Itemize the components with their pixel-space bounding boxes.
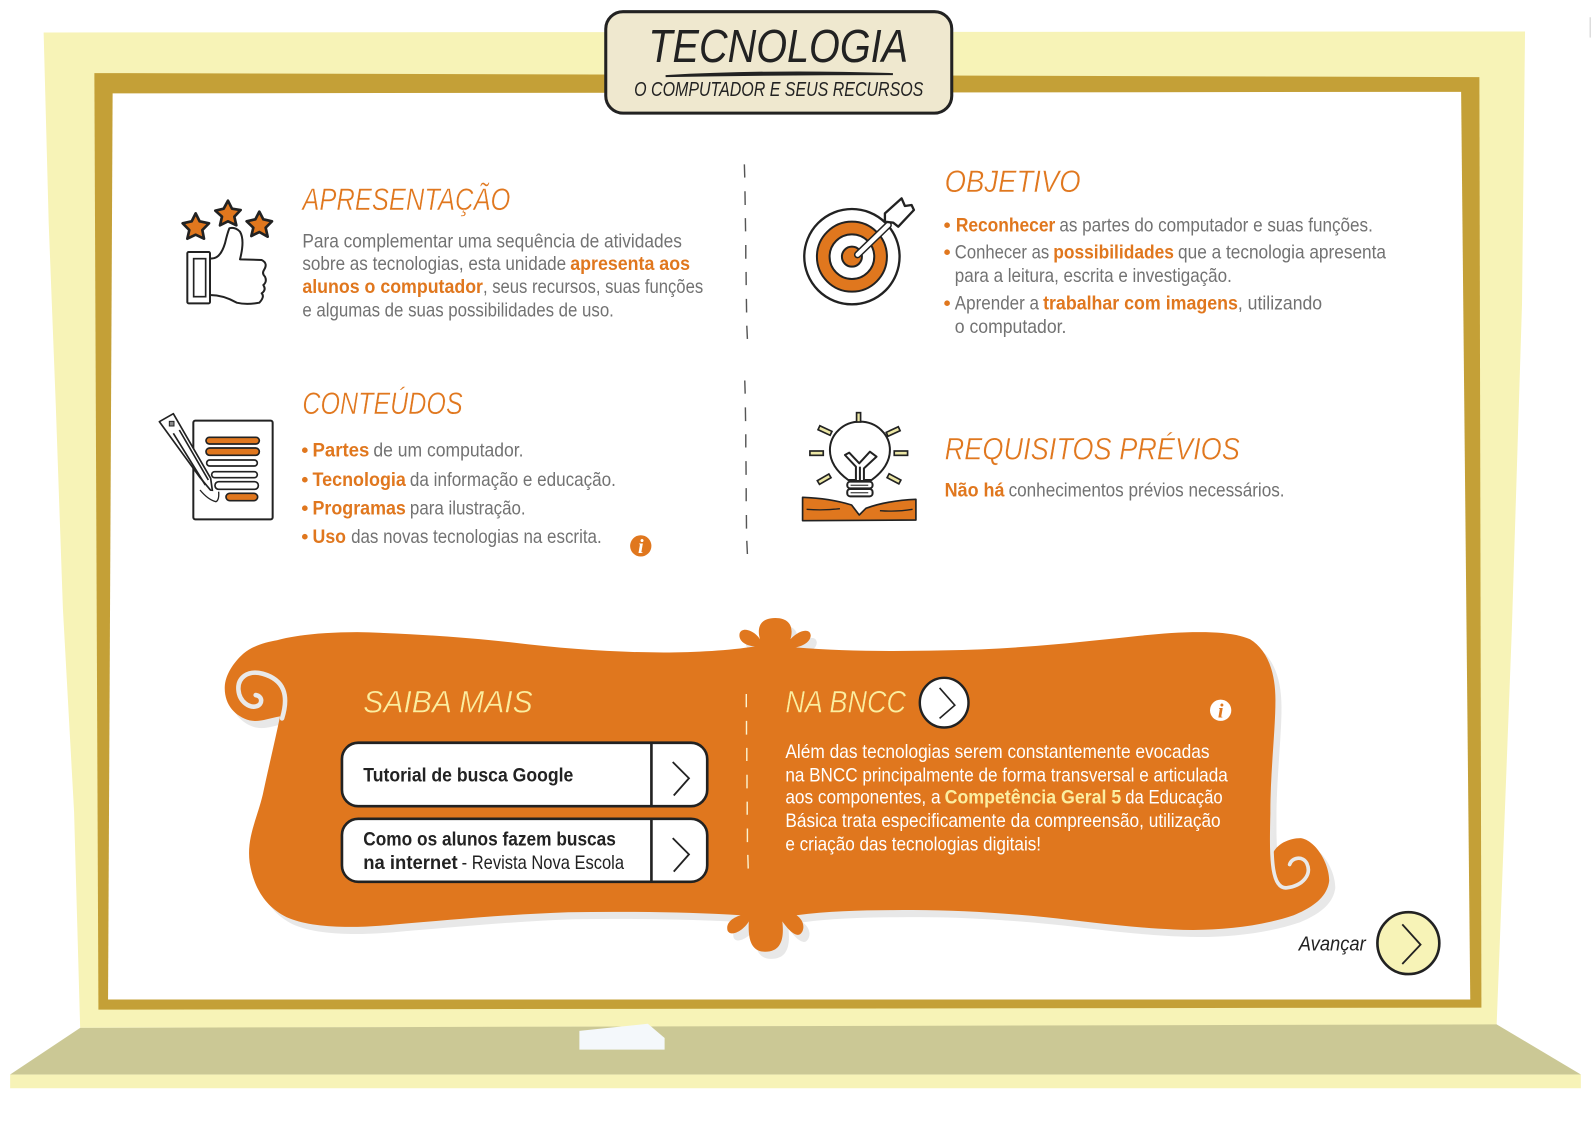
chalk — [579, 1024, 665, 1050]
text block: apresentacao: Para complementar uma sequência de atividades — [302, 231, 682, 253]
title: TECNOLOGIA: TECNOLOGIA — [648, 20, 908, 72]
icon: info orange: i — [638, 536, 644, 558]
text block: bncc: Além das tecnologias serem constantemente evocadas — [785, 741, 1210, 763]
list: objetivo: Aprender a — [955, 292, 1039, 314]
label: avancar: Avançar — [1298, 934, 1367, 956]
list: objetivo: possibilidades — [1053, 242, 1174, 264]
heading: objetivo: OBJETIVO — [945, 164, 1081, 199]
button: tutorial de busca — [342, 743, 707, 806]
list: conteudos: Tecnologia — [313, 469, 407, 491]
list: objetivo: trabalhar com imagens — [1043, 292, 1238, 314]
button: avancar — [1377, 912, 1439, 974]
list: objetivo: • — [944, 214, 951, 236]
text block: bncc: Competência Geral 5 — [945, 787, 1121, 809]
button: bncc arrow — [920, 678, 969, 728]
icon: info white — [1210, 700, 1231, 722]
board: white panel — [108, 92, 1470, 999]
list: objetivo: Conhecer as — [955, 242, 1049, 264]
list: conteudos: Uso — [313, 526, 346, 548]
icon: target with arrow — [804, 198, 914, 304]
text block: bncc: aos componentes, a — [785, 787, 941, 809]
button: como os alunos: Como os alunos fazem buscas — [363, 829, 616, 851]
text block: requisitos: conhecimentos prévios necessários. — [1009, 480, 1285, 502]
left scroll curl — [238, 673, 285, 718]
list: objetivo: , utilizando — [1238, 292, 1322, 314]
heading: requisitos previos: REQUISITOS PRÉVIOS — [945, 432, 1240, 467]
list: conteudos: • — [301, 526, 308, 548]
text block: bncc: na BNCC principalmente de forma transversal e articulada — [785, 764, 1228, 786]
heading: na bncc: NA BNCC — [785, 684, 906, 719]
list: conteudos: para ilustração. — [410, 497, 526, 519]
text block: apresentacao: e algumas de suas possibilidades de uso. — [302, 300, 614, 322]
list: objetivo: que a tecnologia apresenta — [1178, 242, 1386, 264]
icon: info white: i — [1218, 700, 1224, 722]
text block: apresentacao: apresenta aos — [570, 253, 690, 275]
text block: bncc: e criação das tecnologias digitais! — [785, 833, 1041, 855]
list: conteudos: • — [301, 469, 308, 491]
button: tutorial de busca: Tutorial de busca Google — [363, 764, 573, 786]
button: como os alunos: - Revista Nova Escola — [462, 852, 624, 874]
list: objetivo: o computador. — [955, 316, 1066, 338]
title plate — [606, 12, 952, 113]
list: objetivo: Reconhecer — [956, 214, 1056, 236]
navigation: avancar — [1298, 912, 1439, 974]
heading: saiba mais: SAIBA MAIS — [363, 684, 533, 719]
list: conteudos: • — [301, 497, 308, 519]
list: objetivo: as partes do computador e suas funções. — [1059, 214, 1373, 236]
divider: lower dashes — [745, 381, 747, 554]
right scroll curl — [1272, 812, 1308, 888]
button: como os alunos: na internet — [363, 852, 458, 874]
panel: orange scroll — [225, 618, 1335, 959]
list: objetivo: • — [944, 242, 951, 264]
icon: pencil and paper — [159, 414, 273, 519]
list: conteudos: Partes — [313, 440, 369, 462]
text block: apresentacao — [302, 231, 703, 322]
divider on scroll — [746, 694, 748, 869]
text block: bncc: Básica trata especificamente da compreensão, utilização — [785, 810, 1221, 832]
list: conteudos: de um computador. — [373, 440, 524, 462]
list: conteudos: • — [301, 440, 308, 462]
subtitle: O COMPUTADOR E SEUS RECURSOS — [634, 79, 924, 101]
panel: apresentacao — [183, 182, 703, 322]
list: conteudos: Programas — [313, 497, 406, 519]
list: objetivo — [944, 214, 1386, 338]
list: conteudos — [301, 440, 616, 548]
tray front edge — [10, 1075, 1581, 1088]
heading: apresentacao: APRESENTAÇÃO — [301, 182, 510, 217]
text block: apresentacao: sobre as tecnologias, esta unidade — [302, 253, 566, 275]
text block: apresentacao: , seus recursos, suas funções — [483, 276, 703, 298]
divider: upper dashes — [744, 164, 747, 339]
text block: requisitos: Não há — [945, 480, 1005, 502]
text block: apresentacao: alunos o computador — [302, 276, 483, 298]
brush underline — [666, 72, 893, 76]
text block: bncc: da Educação — [1125, 787, 1223, 809]
icon: info orange — [630, 535, 651, 558]
scroll body — [225, 618, 1329, 952]
edge mark — [1589, 17, 1591, 38]
panel: objetivo — [804, 164, 1386, 338]
button: como os alunos — [342, 819, 707, 882]
panel: requisitos previos — [803, 413, 1285, 521]
tray top surface — [10, 1024, 1581, 1075]
icon: light bulb over book — [803, 413, 916, 521]
scroll shadow — [231, 625, 1335, 959]
list: objetivo: para a leitura, escrita e investigação. — [955, 265, 1232, 287]
heading: conteudos: CONTEÚDOS — [302, 386, 463, 421]
text block: bncc — [785, 741, 1228, 855]
board: gold frame — [94, 73, 1481, 1010]
list: conteudos: da informação e educação. — [410, 469, 616, 491]
list: objetivo: • — [944, 292, 951, 314]
panel: conteudos — [159, 386, 651, 558]
list: conteudos: das novas tecnologias na escrita. — [351, 526, 602, 548]
icon: thumbs up with stars — [183, 201, 272, 304]
